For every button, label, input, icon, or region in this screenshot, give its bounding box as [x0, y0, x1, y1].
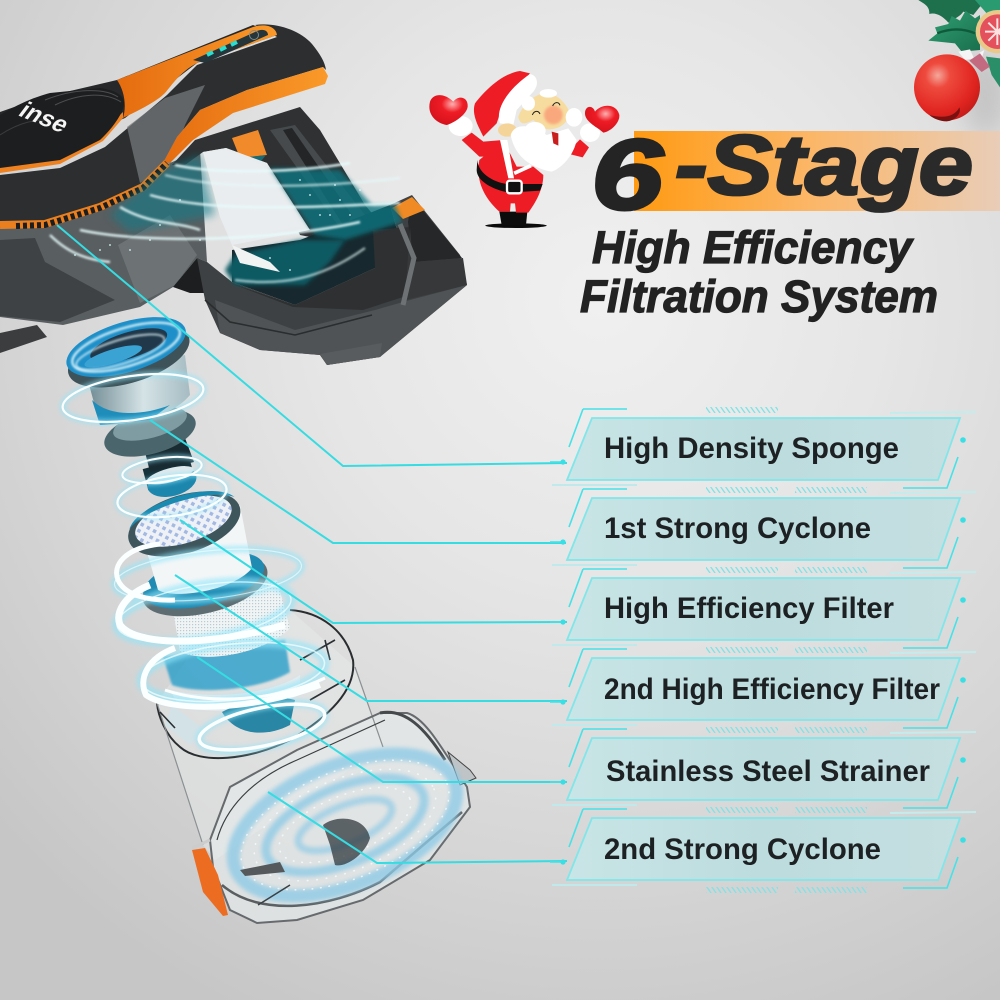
panel: Stainless Steel Strainer	[550, 727, 976, 808]
control panel with battery lights	[193, 30, 268, 63]
cuffs	[449, 116, 473, 136]
fine mesh cylinder	[173, 580, 290, 657]
right mitten	[585, 106, 619, 133]
panel: Stainless Steel Strainer: Stainless Steel Strainer	[606, 755, 931, 788]
transparent dust canister	[157, 610, 477, 925]
upper holly leaf	[918, 0, 993, 23]
blue ring under filter	[136, 540, 274, 628]
belt	[477, 160, 543, 193]
eyes	[532, 103, 560, 115]
heading: High Efficiency Filtration System	[580, 222, 938, 322]
translucent lower head	[0, 150, 207, 325]
neck	[145, 438, 194, 472]
panel: 2nd High Efficiency Filter	[550, 647, 976, 728]
panel: 1st Strong Cyclone: 1st Strong Cyclone	[604, 512, 871, 545]
filter top ring	[120, 479, 248, 569]
heading: High Efficiency Filtration System: High Efficiency	[592, 222, 914, 273]
heading: High Efficiency Filtration System: Filtration System	[580, 271, 938, 322]
panel: High Efficiency Filter: High Efficiency Filter	[604, 592, 895, 625]
swirling air rings around filters	[60, 366, 329, 760]
mouth	[552, 132, 558, 146]
orange latch	[192, 848, 228, 916]
coat trim	[500, 140, 532, 178]
pleated filter body	[142, 505, 252, 594]
teal connector ring	[143, 456, 200, 502]
arms	[462, 133, 503, 157]
boots	[499, 212, 527, 225]
lower bin rim	[210, 713, 470, 923]
foot	[0, 325, 47, 353]
handheld vacuum head	[0, 24, 467, 365]
leader lines	[57, 225, 567, 863]
trigger	[232, 130, 267, 158]
airflow through vacuum handle	[50, 150, 402, 285]
beard	[511, 126, 577, 172]
panel: High Density Sponge: High Density Sponge	[604, 432, 899, 465]
flange	[99, 401, 201, 465]
icon: Santa Claus	[429, 71, 619, 228]
buckle	[507, 181, 522, 193]
orange slice	[976, 10, 1000, 53]
ground shadow	[485, 223, 547, 228]
legs and body	[478, 140, 543, 213]
orange gradient band	[634, 131, 1000, 211]
red bauble	[914, 54, 980, 120]
shell mid section	[0, 24, 326, 225]
panel: High Density Sponge	[550, 407, 976, 488]
blue whirl	[213, 725, 477, 925]
core mechanics	[323, 819, 370, 865]
lower orange band	[163, 67, 328, 163]
upper cup blue interior	[163, 640, 290, 690]
face	[518, 93, 570, 129]
handle window	[203, 148, 310, 245]
title: 6-Stage: -Stage	[675, 118, 973, 212]
dust-cup release disc	[0, 88, 124, 168]
filter stack	[59, 305, 290, 657]
brand mark: inse	[13, 98, 74, 138]
hair and moustache curls	[524, 122, 546, 139]
top ring	[59, 305, 197, 400]
orange strip	[117, 25, 277, 118]
icon: Christmas holly and ornament	[914, 0, 1000, 137]
lower holly leaf	[928, 11, 980, 52]
handle frame	[172, 107, 382, 245]
panel: 1st Strong Cyclone	[550, 487, 976, 568]
panel: High Efficiency Filter	[550, 567, 976, 648]
panel: 2nd Strong Cyclone	[550, 807, 976, 893]
title: 6-Stage	[591, 118, 1000, 231]
ear	[498, 123, 517, 137]
vent band	[0, 163, 167, 225]
title text: 6	[591, 119, 665, 231]
panel: 2nd High Efficiency Filter: 2nd High Efficiency Filter	[604, 673, 940, 706]
battery tray	[232, 205, 400, 305]
sponge body	[87, 355, 190, 425]
upper cup rim	[157, 610, 353, 758]
left mitten	[429, 95, 468, 125]
soft shadow	[963, 53, 1000, 137]
battery silhouette	[197, 195, 467, 365]
hat	[474, 71, 530, 137]
panel: 2nd Strong Cyclone: 2nd Strong Cyclone	[604, 833, 881, 866]
